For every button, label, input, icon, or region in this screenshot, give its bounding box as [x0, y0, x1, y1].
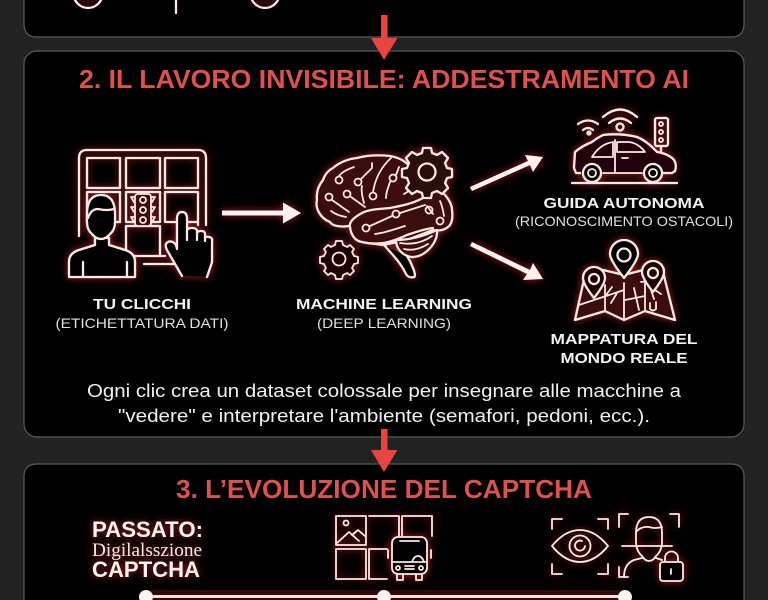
- timeline: [139, 590, 632, 600]
- icon: map with location pins: [575, 240, 675, 320]
- text: past, digitalised captcha: Digilalsszione: [92, 540, 202, 561]
- label: machine learning: [296, 296, 472, 331]
- label: real world mapping: MAPPATURA DEL: [550, 331, 698, 348]
- label: machine learning: (DEEP LEARNING): [317, 315, 451, 331]
- panel: step 2: [24, 51, 744, 437]
- icon: image grid with bus: [336, 516, 432, 580]
- panel: step 1 (cropped): [24, 0, 744, 37]
- label: you click: (ETICHETTATURA DATI): [56, 315, 228, 331]
- heading: step 2: 2. IL LAVORO INVISIBILE: ADDESTRAMENTO AI: [79, 64, 689, 94]
- arrow: step 1 to step 2: [371, 15, 398, 60]
- heading: step 3: 3. L’EVOLUZIONE DEL CAPTCHA: [176, 474, 592, 504]
- icon: car with wifi and traffic light: [572, 110, 677, 183]
- label: you click: TU CLICCHI: [93, 296, 191, 313]
- icon: face scan with padlock: [619, 514, 683, 581]
- icon: labelling grid with person and hand: [69, 150, 212, 277]
- icon: brain with gears: [317, 148, 452, 279]
- panel: step 3: [24, 464, 744, 600]
- label: real world mapping: MONDO REALE: [560, 350, 688, 367]
- arrow: to autonomous driving: [470, 155, 543, 191]
- label: you click: [56, 296, 228, 331]
- label: autonomous driving: (RICONOSCIMENTO OSTACOLI): [515, 213, 733, 229]
- text: past, digitalised captcha: PASSATO:: [92, 517, 203, 542]
- text block: dataset explanation: Ogni clic crea un dataset colossale per insegnare alle macchine a: [87, 381, 682, 401]
- icon: eye scan: [552, 519, 608, 574]
- text block: dataset explanation: [87, 381, 682, 426]
- label: machine learning: MACHINE LEARNING: [296, 296, 472, 313]
- label: autonomous driving: [515, 195, 733, 229]
- text: past, digitalised captcha: [92, 517, 203, 582]
- label: real world mapping: [550, 331, 698, 367]
- label: autonomous driving: GUIDA AUTONOMA: [544, 195, 705, 212]
- text: past, digitalised captcha: CAPTCHA: [92, 557, 200, 582]
- arrow: step 2 to step 3: [371, 429, 398, 472]
- text block: dataset explanation: "vedere" e interpretare l'ambiente (semafori, pedoni, ecc.).: [118, 406, 650, 426]
- arrow: to world mapping: [470, 242, 543, 280]
- arrow: click to machine learning: [222, 202, 301, 224]
